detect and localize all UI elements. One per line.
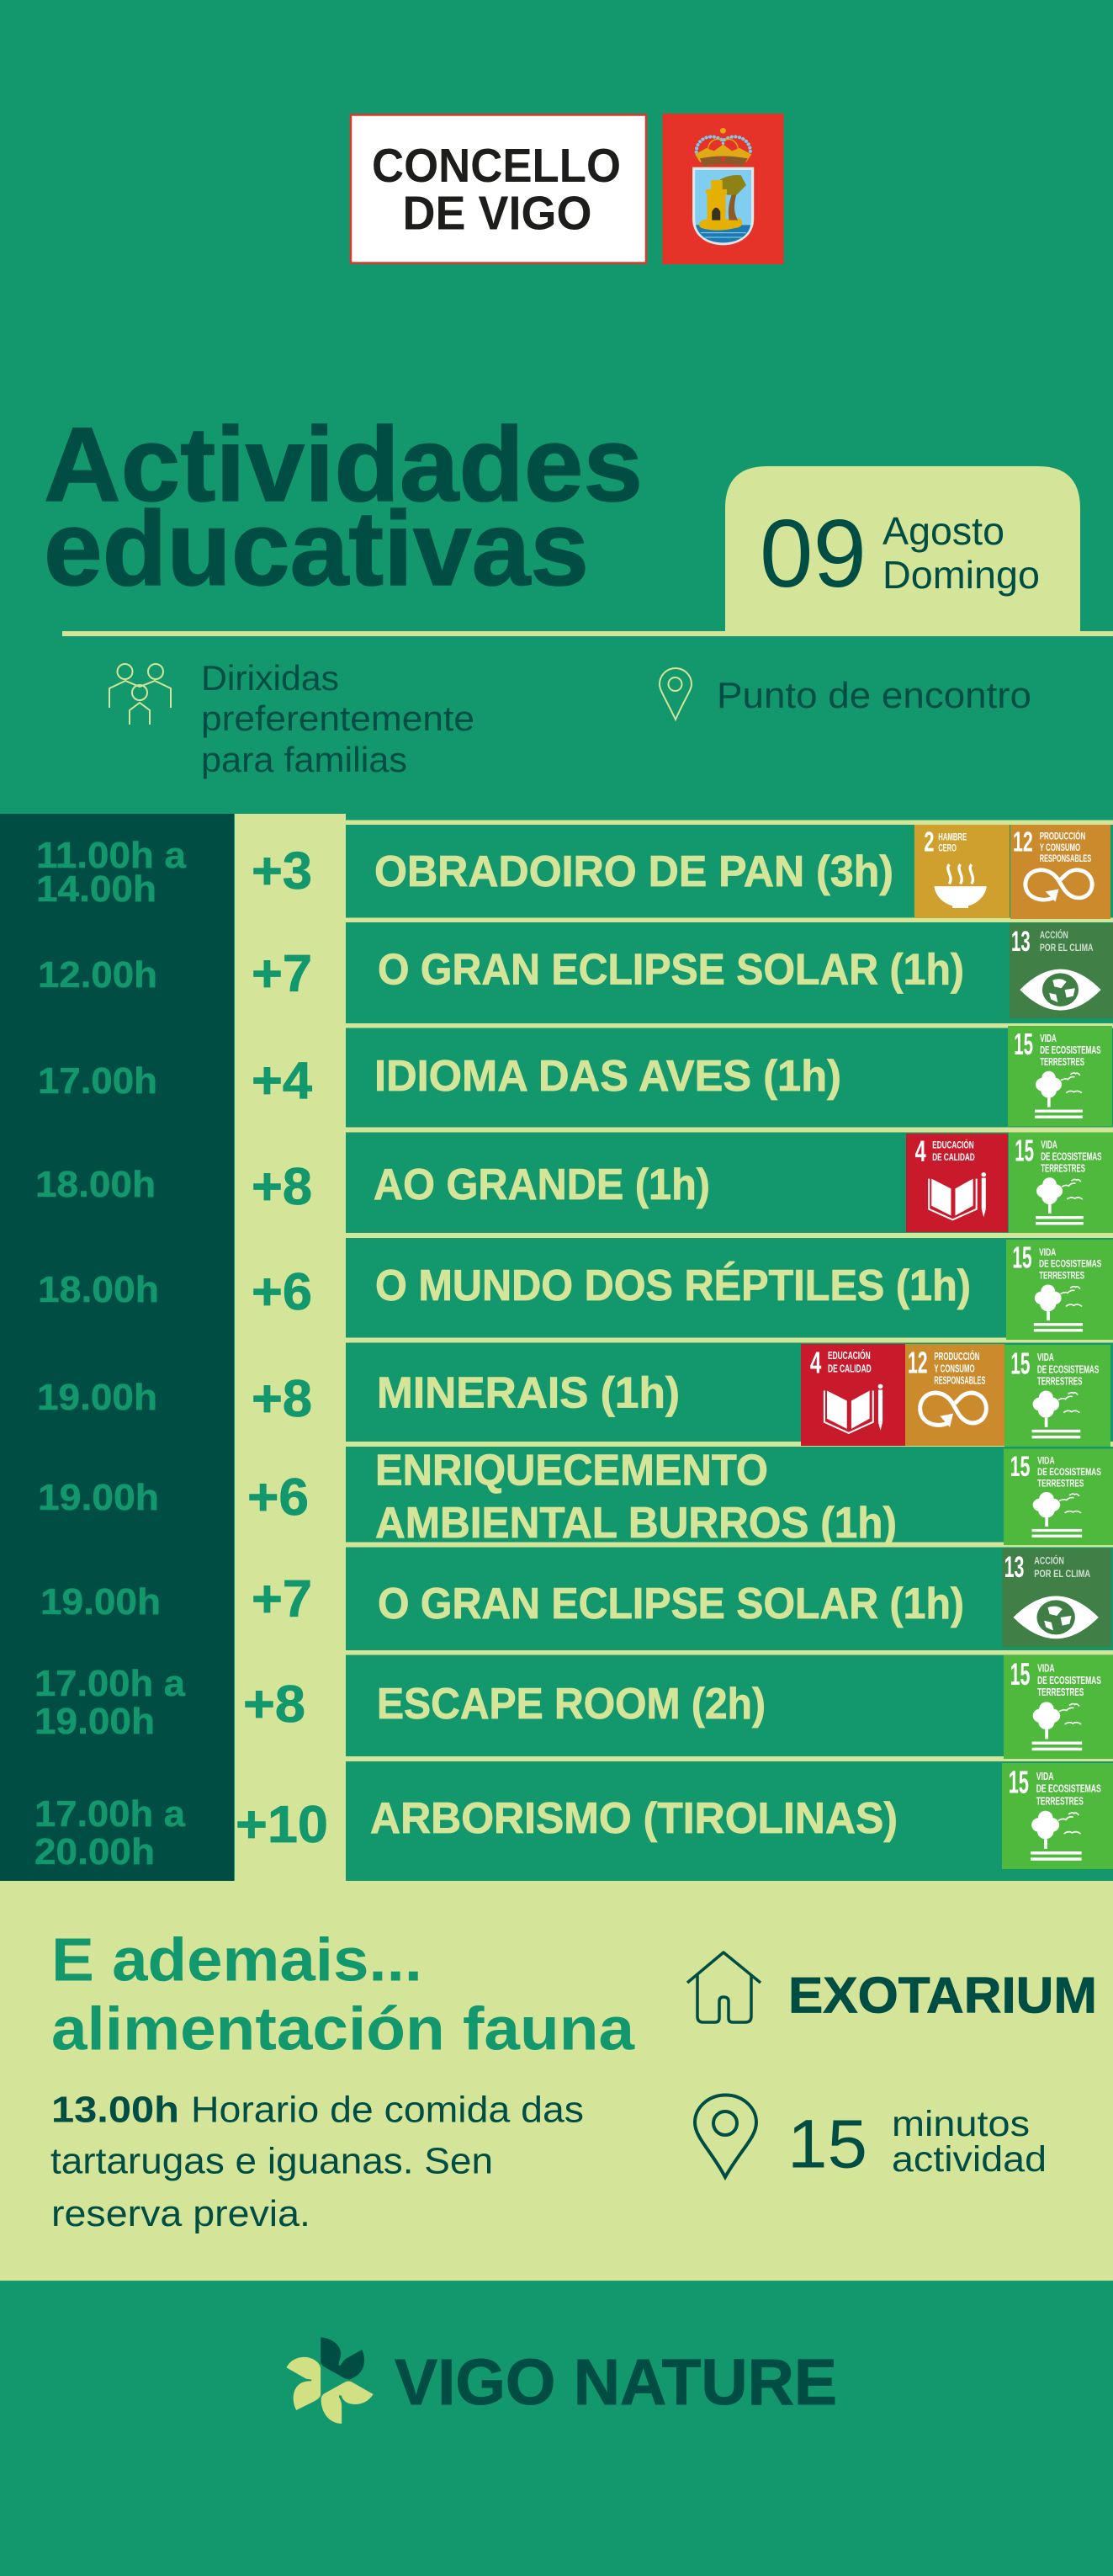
title: educativas	[44, 491, 589, 608]
row: Idioma das aves: +4	[252, 1052, 313, 1110]
date month and weekday: Domingo	[882, 553, 1040, 597]
date month and weekday	[882, 509, 1040, 597]
icon: SDG 13: POR EL CLIMA	[1034, 1568, 1090, 1580]
icon: SDG 15	[1004, 1449, 1113, 1545]
icon: SDG 15: VIDA	[1036, 1770, 1054, 1782]
icon: SDG 12: Y CONSUMO	[1040, 842, 1080, 853]
row: Minerais	[37, 1344, 1110, 1447]
icon: SDG 4: EDUCACIÓN	[932, 1139, 974, 1150]
icon: location pin	[695, 2095, 756, 2177]
audience text: Dirixidas	[201, 658, 339, 698]
row: Obradoiro de pan: 14.00h	[36, 868, 156, 910]
row: Enriquecemento ambiental burros: 19.00h	[38, 1477, 159, 1518]
icon: SDG 4: 4	[810, 1346, 822, 1379]
icon: SDG 13: ACCIÓN	[1040, 928, 1068, 941]
date tab	[725, 466, 1080, 633]
feeding description: Horario de comida das	[191, 2089, 584, 2131]
icon: house	[687, 1952, 761, 2022]
duration number: 15	[787, 2106, 867, 2183]
icon: SDG 15	[1009, 1133, 1113, 1233]
icon: SDG 13	[1003, 1548, 1111, 1647]
icon: SDG 15: VIDA	[1037, 1454, 1055, 1466]
row: Enriquecemento ambiental burros: +6	[247, 1469, 309, 1527]
audience text: preferentemente	[201, 698, 474, 738]
icon: SDG 15: 15	[1010, 1346, 1030, 1380]
icon: SDG 4: EDUCACIÓN	[828, 1349, 871, 1362]
icon: SDG 12: PRODUCCIÓN	[934, 1350, 980, 1362]
row: Arborismo	[34, 1763, 1113, 1872]
row: Arborismo: +10	[236, 1796, 328, 1854]
row: Obradoiro de pan	[36, 825, 1110, 919]
icon: SDG 15: TERRESTRES	[1037, 1477, 1084, 1489]
row: Enriquecemento ambiental burros: ENRIQUECEMENTO	[375, 1446, 768, 1495]
date month and weekday: Agosto	[882, 509, 1004, 553]
meeting point text: Punto de encontro	[717, 675, 1031, 716]
row: Ao grande	[35, 1133, 1113, 1233]
row: O gran eclipse solar: 12.00h	[38, 954, 157, 996]
feeding description: 13.00h	[51, 2089, 179, 2131]
feeding description: reserva previa.	[51, 2193, 310, 2234]
row: Escape room: 17.00h a	[34, 1663, 186, 1704]
icon: SDG 15: VIDA	[1041, 1139, 1057, 1150]
row: O gran eclipse solar	[38, 923, 1113, 1018]
duration label: actividad	[892, 2139, 1047, 2180]
row: Escape room: 19.00h	[34, 1701, 155, 1742]
logo wordmark box: DE VIGO	[402, 187, 592, 241]
icon: SDG 2: HAMBRE	[938, 832, 967, 842]
row: Obradoiro de pan: 11.00h a	[36, 835, 187, 876]
icon: SDG 15: VIDA	[1037, 1662, 1055, 1674]
icon: meeting point pin	[660, 668, 692, 720]
feeding description: tartarugas e iguanas. Sen	[50, 2141, 493, 2181]
icon: SDG 2	[914, 825, 1010, 918]
row: Minerais: +8	[252, 1370, 312, 1428]
duration label	[892, 2104, 1047, 2180]
icon: SDG 12: 12	[1013, 827, 1033, 858]
audience text	[201, 658, 474, 779]
header rule	[62, 631, 1113, 636]
venue name: EXOTARIUM	[788, 1968, 1097, 2023]
icon: SDG 15: TERRESTRES	[1037, 1686, 1084, 1698]
icon: SDG 12	[1010, 825, 1110, 919]
heading: E ademais...	[51, 1927, 422, 1994]
icon: SDG 4: DE CALIDAD	[932, 1151, 975, 1163]
icon: SDG 15: 15	[1010, 1450, 1030, 1482]
icon: SDG 13: 13	[1011, 925, 1031, 958]
icon: SDG 15: TERRESTRES	[1040, 1056, 1084, 1068]
icon: SDG 12	[905, 1344, 1004, 1446]
row: Ao grande: +8	[252, 1158, 312, 1216]
icon: SDG 15: TERRESTRES	[1036, 1795, 1084, 1807]
row: Escape room	[34, 1655, 1113, 1759]
row: Escape room: +8	[243, 1676, 305, 1734]
panel: feeding info	[0, 1881, 1113, 2281]
panel: time column	[0, 814, 234, 1881]
icon: SDG 12: PRODUCCIÓN	[1040, 830, 1085, 842]
audience text: para familias	[201, 740, 407, 779]
row: Minerais: MINERAIS (1h)	[377, 1368, 680, 1417]
icon: SDG 15	[1004, 1345, 1110, 1447]
heading: alimentación fauna	[51, 1996, 635, 2063]
icon: SDG 12: 12	[908, 1346, 928, 1379]
duration label: minutos	[892, 2104, 1030, 2144]
icon: SDG 4: 4	[915, 1135, 926, 1168]
icon: SDG 15: 15	[1010, 1658, 1030, 1692]
row: O gran eclipse solar (second)	[40, 1548, 1111, 1647]
icon: SDG 12: RESPONSABLES	[934, 1374, 985, 1386]
title: Actividades	[44, 406, 643, 523]
row: O mundo dos réptiles: 18.00h	[38, 1269, 159, 1310]
icon: SDG 15	[1008, 1026, 1112, 1126]
icon: SDG 13: 13	[1004, 1550, 1024, 1584]
row: Escape room: ESCAPE ROOM (2h)	[377, 1680, 766, 1729]
title	[44, 406, 643, 608]
logo: Concello de Vigo	[351, 114, 784, 264]
row: O gran eclipse solar: +7	[252, 945, 312, 1003]
icon: SDG 15: 15	[1015, 1134, 1034, 1167]
row: Enriquecemento ambiental burros	[38, 1446, 1113, 1548]
icon: SDG 4	[906, 1134, 1008, 1232]
icon: SDG 15: 15	[1014, 1027, 1033, 1061]
icon: SDG 12: Y CONSUMO	[934, 1362, 975, 1374]
icon: SDG 15	[1006, 1240, 1113, 1340]
row: Obradoiro de pan: +3	[252, 842, 312, 900]
row: O gran eclipse solar (second): +7	[252, 1570, 312, 1628]
row: Idioma das aves	[38, 1026, 1112, 1126]
icon: SDG 13	[1010, 923, 1113, 1018]
icon: SDG 13: ACCIÓN	[1034, 1554, 1064, 1566]
logo wordmark box: CONCELLO	[372, 139, 621, 193]
icon: SDG 15: VIDA	[1040, 1033, 1057, 1044]
row: Obradoiro de pan: OBRADOIRO DE PAN (3h)	[374, 847, 893, 896]
logo wordmark box	[351, 114, 646, 263]
row: Idioma das aves: 17.00h	[38, 1060, 157, 1102]
heading	[51, 1927, 635, 2063]
row: Enriquecemento ambiental burros: AMBIENTAL BURROS (1h)	[375, 1499, 897, 1548]
row: Arborismo: ARBORISMO (TIROLINAS)	[370, 1794, 898, 1843]
row: O mundo dos réptiles: O MUNDO DOS RÉPTILES (1h)	[375, 1261, 971, 1310]
icon: SDG 15: TERRESTRES	[1041, 1163, 1085, 1174]
icon: SDG 15	[1004, 1655, 1113, 1759]
row: Minerais: 19.00h	[37, 1377, 157, 1418]
icon: SDG 2: CERO	[938, 843, 957, 853]
icon: SDG 15: VIDA	[1039, 1246, 1056, 1258]
row: O mundo dos réptiles: +6	[252, 1263, 312, 1321]
icon: SDG 15: 15	[1012, 1241, 1032, 1274]
icon: SDG 15: VIDA	[1037, 1351, 1054, 1363]
icon: leaves	[287, 2337, 374, 2424]
icon: SDG 15: TERRESTRES	[1039, 1269, 1084, 1282]
icon: SDG 15: TERRESTRES	[1037, 1375, 1083, 1387]
icon: family	[109, 664, 171, 725]
row: Ao grande: 18.00h	[35, 1164, 156, 1205]
row: Idioma das aves: IDIOMA DAS AVES (1h)	[374, 1052, 841, 1101]
row: O gran eclipse solar: O GRAN ECLIPSE SOLAR (1h)	[378, 946, 964, 995]
icon: SDG 4	[801, 1344, 905, 1446]
logo: Vigo Nature	[287, 2337, 837, 2424]
row: O mundo dos réptiles	[38, 1240, 1113, 1340]
row: O gran eclipse solar (second): O GRAN ECLIPSE SOLAR (1h)	[378, 1580, 964, 1628]
row: O gran eclipse solar (second): 19.00h	[40, 1581, 161, 1623]
feeding description	[50, 2089, 584, 2234]
row: Ao grande: AO GRANDE (1h)	[374, 1161, 710, 1209]
date number: 09	[760, 501, 867, 608]
panel: places column	[235, 814, 346, 1883]
icon: SDG 2: 2	[924, 827, 935, 858]
icon: SDG 15: 15	[1009, 1765, 1029, 1800]
logo coat of arms on red	[663, 114, 784, 264]
row: Arborismo: 17.00h a	[34, 1793, 186, 1835]
icon: SDG 4: DE CALIDAD	[828, 1362, 872, 1374]
icon: SDG 15	[1002, 1763, 1113, 1869]
row: Arborismo: 20.00h	[34, 1831, 155, 1872]
wordmark: VIGO NATURE	[395, 2346, 837, 2419]
